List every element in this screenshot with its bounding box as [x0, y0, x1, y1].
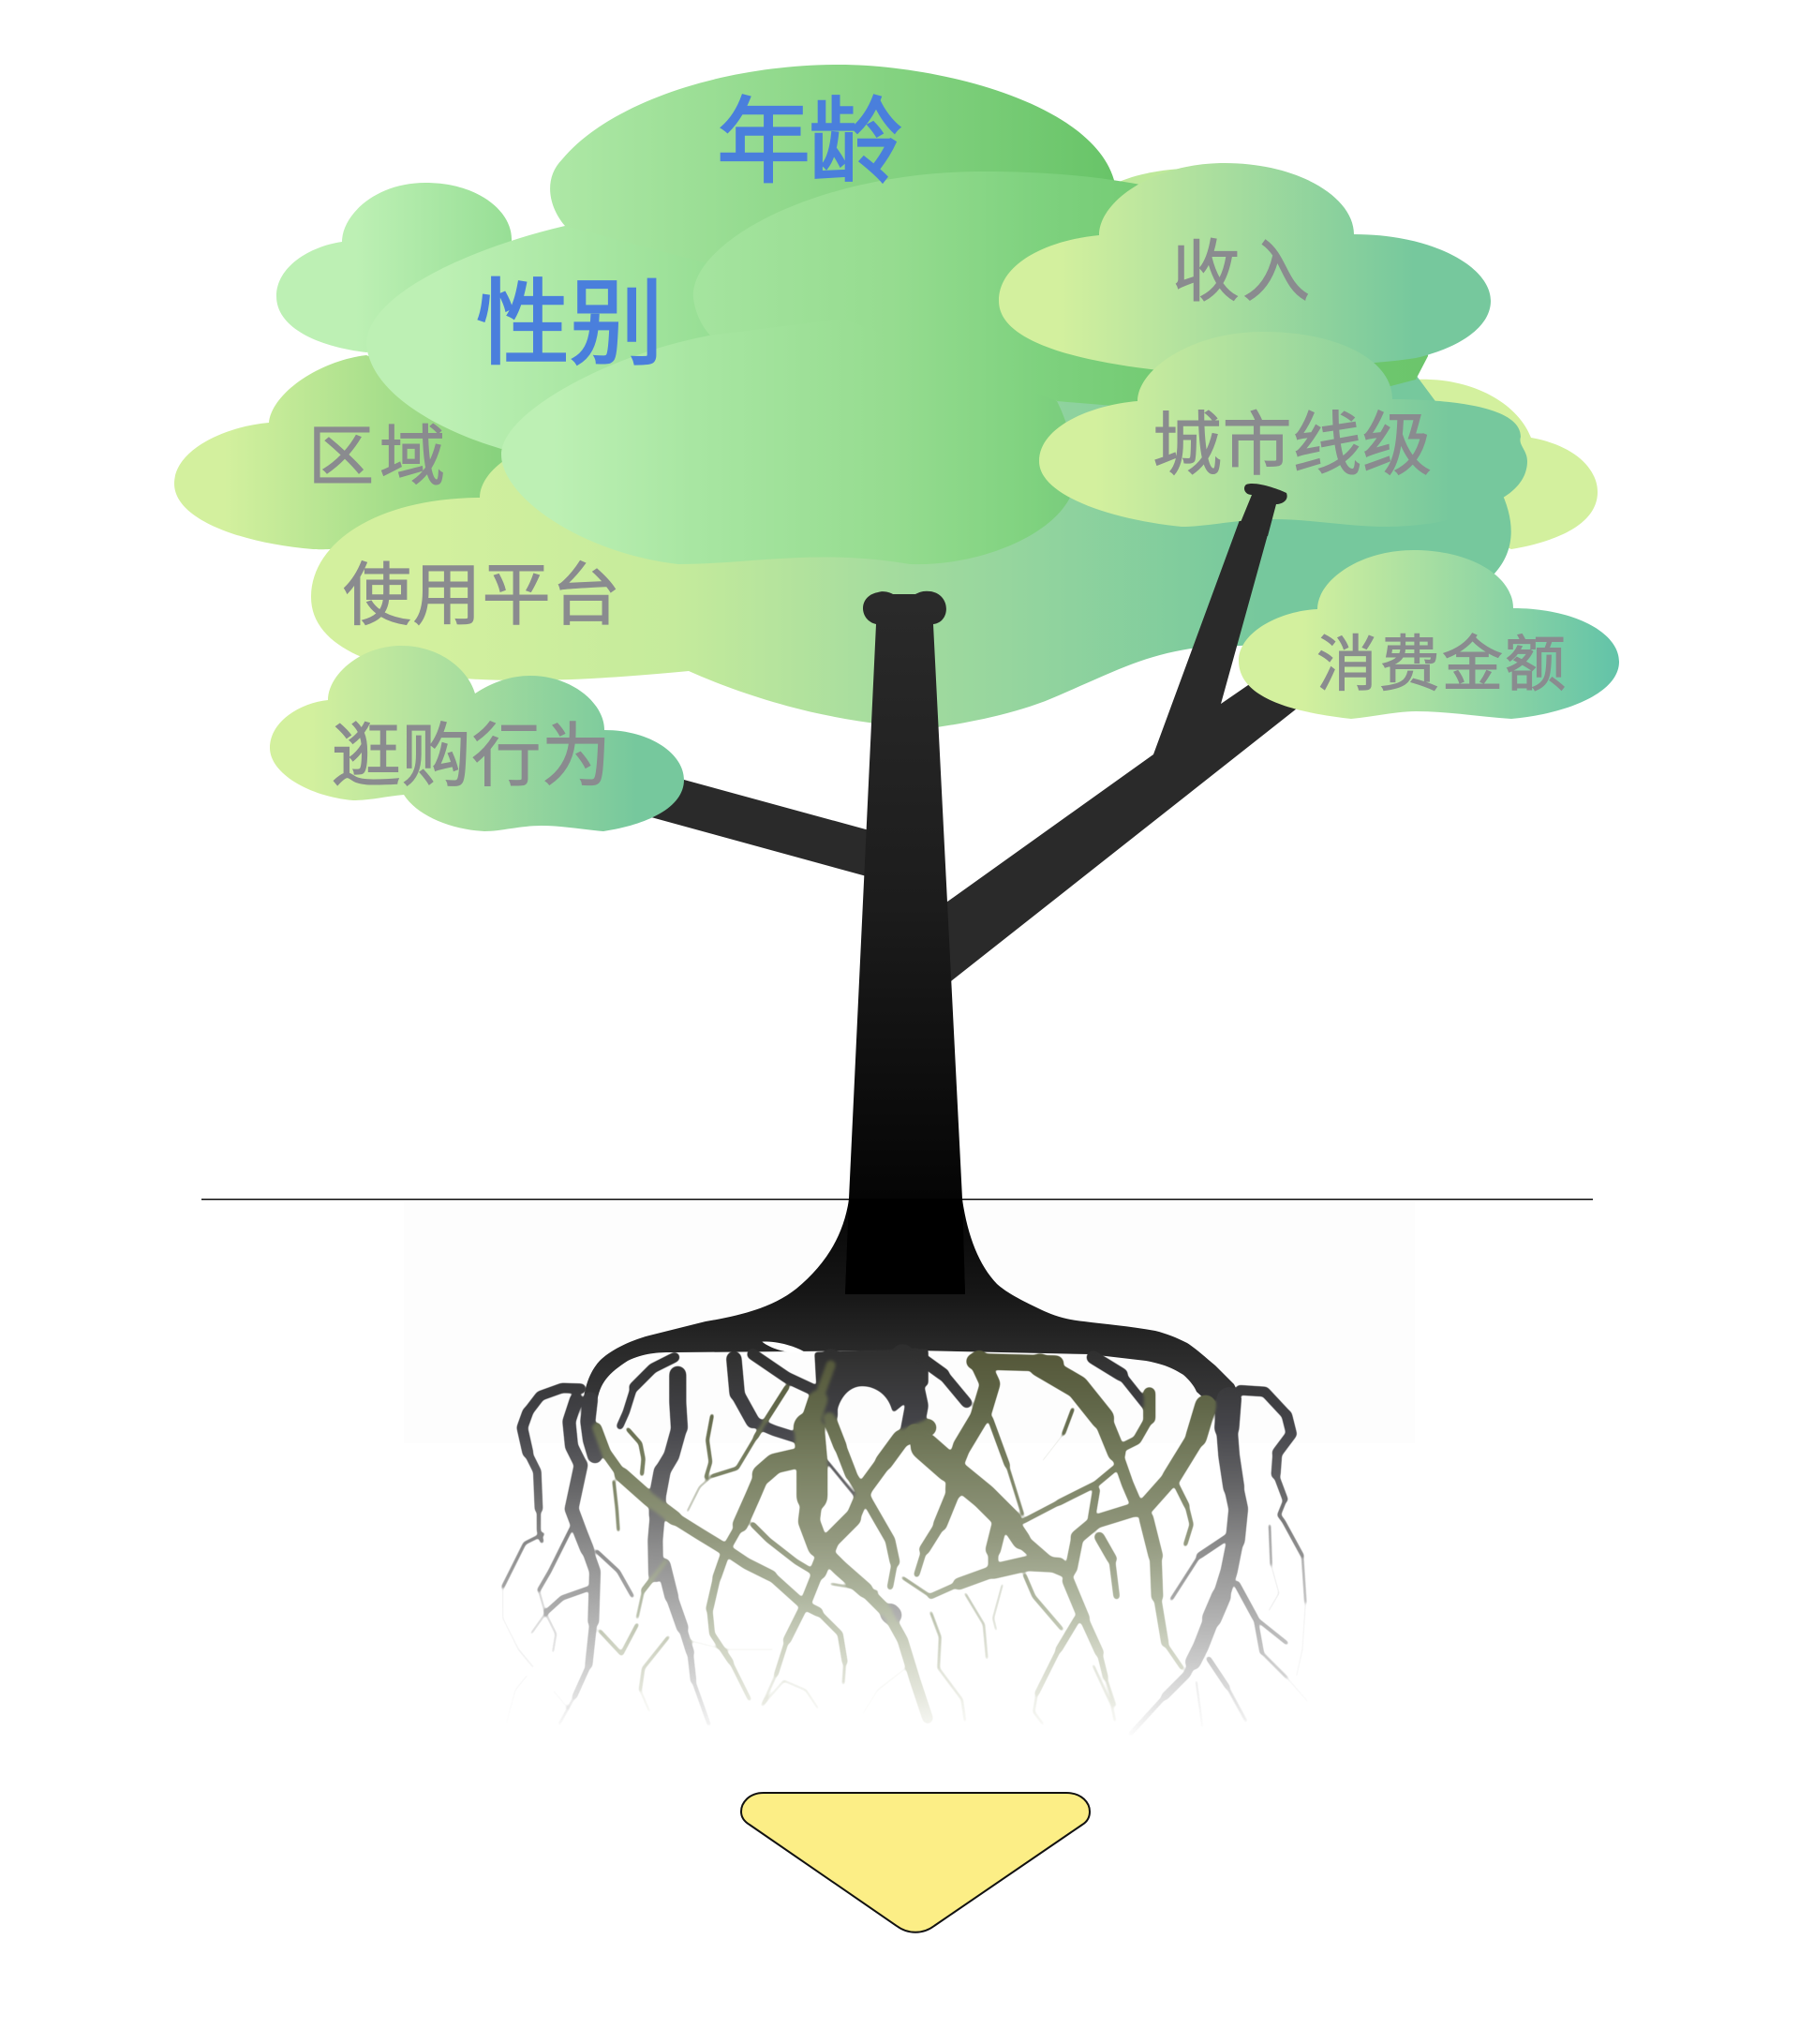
tree canopy background clouds: [276, 65, 1598, 549]
ground line: [201, 1199, 1593, 1200]
cloud: income: [999, 163, 1491, 370]
trunk base solid: [845, 1199, 965, 1294]
trunk: [845, 591, 965, 1294]
cloud: spending amount: [1239, 550, 1619, 719]
label: region: 区域: [308, 420, 445, 493]
label: usage platform: 使用平台: [343, 558, 620, 634]
label: gender: 性别: [476, 272, 663, 377]
branch: right with twig: [937, 484, 1297, 988]
cloud: canopy centre lower: [501, 319, 1076, 564]
label: city tier: 城市线级: [1152, 406, 1432, 484]
root flare and main arms: [583, 1200, 1241, 1412]
cloud: city tier: [1039, 332, 1527, 527]
label: browsing behaviour: 逛购行为: [332, 717, 611, 795]
cloud: canopy centre top: [693, 172, 1428, 431]
cloud: usage platform: [311, 361, 1511, 727]
branch: left: [651, 780, 876, 878]
cloud: browsing behaviour: [270, 646, 684, 831]
label: age: 年龄: [717, 90, 902, 195]
ground shade: [404, 1201, 1415, 1443]
roots: left half: [503, 1341, 928, 1724]
label: income: 收入: [1172, 235, 1310, 310]
arrow: yellow down triangle: [741, 1793, 1090, 1932]
roots: right half: [902, 1354, 1309, 1734]
twig tip over city cloud: [1235, 484, 1287, 536]
cloud: gender: [366, 226, 721, 449]
cloud: region: [174, 355, 562, 549]
label: spending amount: 消费金额: [1316, 630, 1566, 698]
